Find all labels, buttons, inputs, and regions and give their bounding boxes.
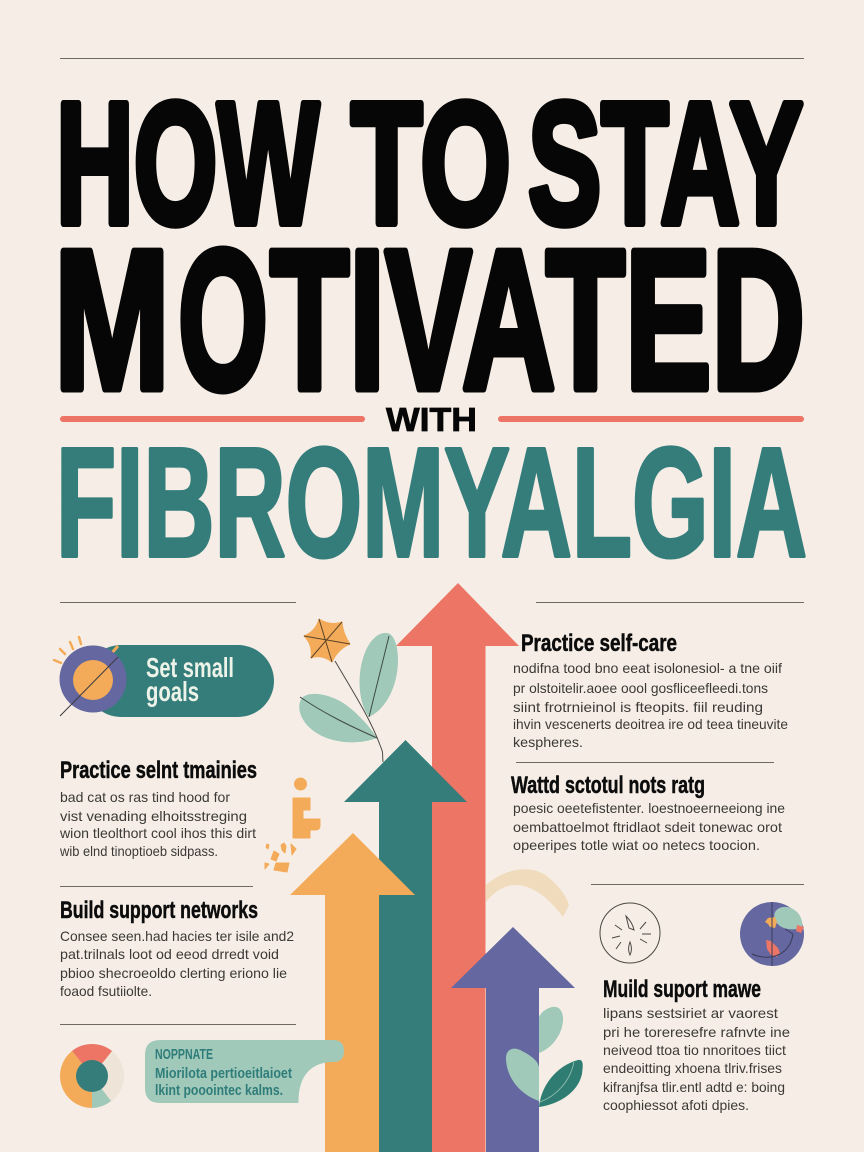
title connector: with: WITH (386, 401, 477, 438)
text block: muild: lipans sestsiriet ar vaorest (603, 1005, 778, 1021)
text block: wattd: opeeripes totle wiat oo netecs toocion. (513, 837, 760, 853)
arrow: teal (344, 740, 467, 1152)
text block: build support networks: pat.trilnals loot od eeod drredt void (60, 946, 279, 962)
text block: build support networks: Build support networks (60, 897, 258, 924)
text block: muild (603, 976, 790, 1113)
text block: muild: pri he toreresefre rafnvte ine (603, 1024, 790, 1040)
text block: practice self-care (513, 630, 788, 750)
icon: target (54, 637, 126, 716)
icon: orange i with confetti (265, 778, 320, 872)
title: TO (351, 66, 511, 260)
text block: practice: wib elnd tinoptioeb sidpass. (59, 843, 218, 859)
text block: practice self-care: siint frotrnieinol is fteopits. fiil reuding (513, 699, 763, 715)
pill: set small goals (85, 645, 274, 717)
decorative swoosh (486, 869, 569, 917)
arrow: orange (290, 833, 415, 1152)
title: O (178, 210, 268, 432)
text block: build support networks: foaod fsutiiolte. (60, 983, 152, 999)
text block: wattd: poesic oeetefistenter. loestnoeerneeiong ine (513, 800, 785, 816)
text block: practice: wion tleolthort cool ihos this dirt (59, 825, 256, 841)
title connector: with (60, 401, 804, 438)
icon: purple globe (740, 902, 804, 966)
callout: note: lkint pooointec kalms. (155, 1082, 283, 1099)
goal badge (54, 637, 274, 717)
text block: practice self-care: kespheres. (513, 734, 583, 750)
text block: wattd: oembattoelmot ftridlaot sdeit tonewac orot (513, 819, 782, 835)
text block: practice self-care: Practice self-care (521, 630, 677, 657)
title: M (54, 210, 170, 432)
text block: wattd: Wattd sctotul nots ratg (511, 772, 705, 799)
illustration: plant with flower (299, 619, 398, 762)
text block: muild: neiveod ttoa tio nnoritoes tiict (603, 1042, 786, 1058)
illustration: leaves on purple arrow (506, 1007, 583, 1107)
text block: muild: coophiessot afoti dpies. (603, 1097, 749, 1113)
goal badge: goals (146, 676, 199, 707)
arrow: purple (451, 927, 575, 1152)
callout: note: Miorilota pertioeitlaioet (155, 1065, 292, 1082)
text block: practice (59, 757, 257, 859)
text block: muild: endeoitting xhoena tlriv.frises (603, 1060, 782, 1076)
title: HOW (56, 66, 319, 260)
icon: outlined sunburst (600, 903, 660, 963)
text block: build support networks (60, 897, 294, 999)
text block: build support networks: Consee seen.had hacies ter isile and2 (60, 928, 294, 944)
text block: build support networks: pbioo shecroeoldo clerting eriono lie (60, 965, 287, 981)
text block: practice self-care: nodifna tood bno eeat isolonesiol- a tne oiif (513, 660, 782, 676)
arrow: coral (396, 583, 519, 1152)
text block: practice: bad cat os ras tind hood for (60, 789, 230, 805)
text block: wattd (511, 772, 785, 853)
text block: practice self-care: ihvin vescenerts deoitrea ire od teea tineuvite (513, 716, 788, 732)
chart: donut (60, 1044, 124, 1108)
text block: practice: vist venading elhoitsstreging (60, 808, 247, 824)
text block: practice self-care: pr olstoitelir.aoee oool gosfliceefleedi.tons (513, 680, 768, 696)
goal badge: Set small (146, 652, 234, 683)
callout: note (145, 1040, 344, 1103)
text block: practice: Practice selnt tmainies (60, 757, 257, 784)
title (54, 66, 807, 589)
text block: muild: kifranjfsa tlir.entl adtd e: boing (603, 1079, 785, 1095)
text block: muild: Muild suport mawe (603, 976, 761, 1003)
callout: note: NOPPNATE (155, 1046, 213, 1063)
